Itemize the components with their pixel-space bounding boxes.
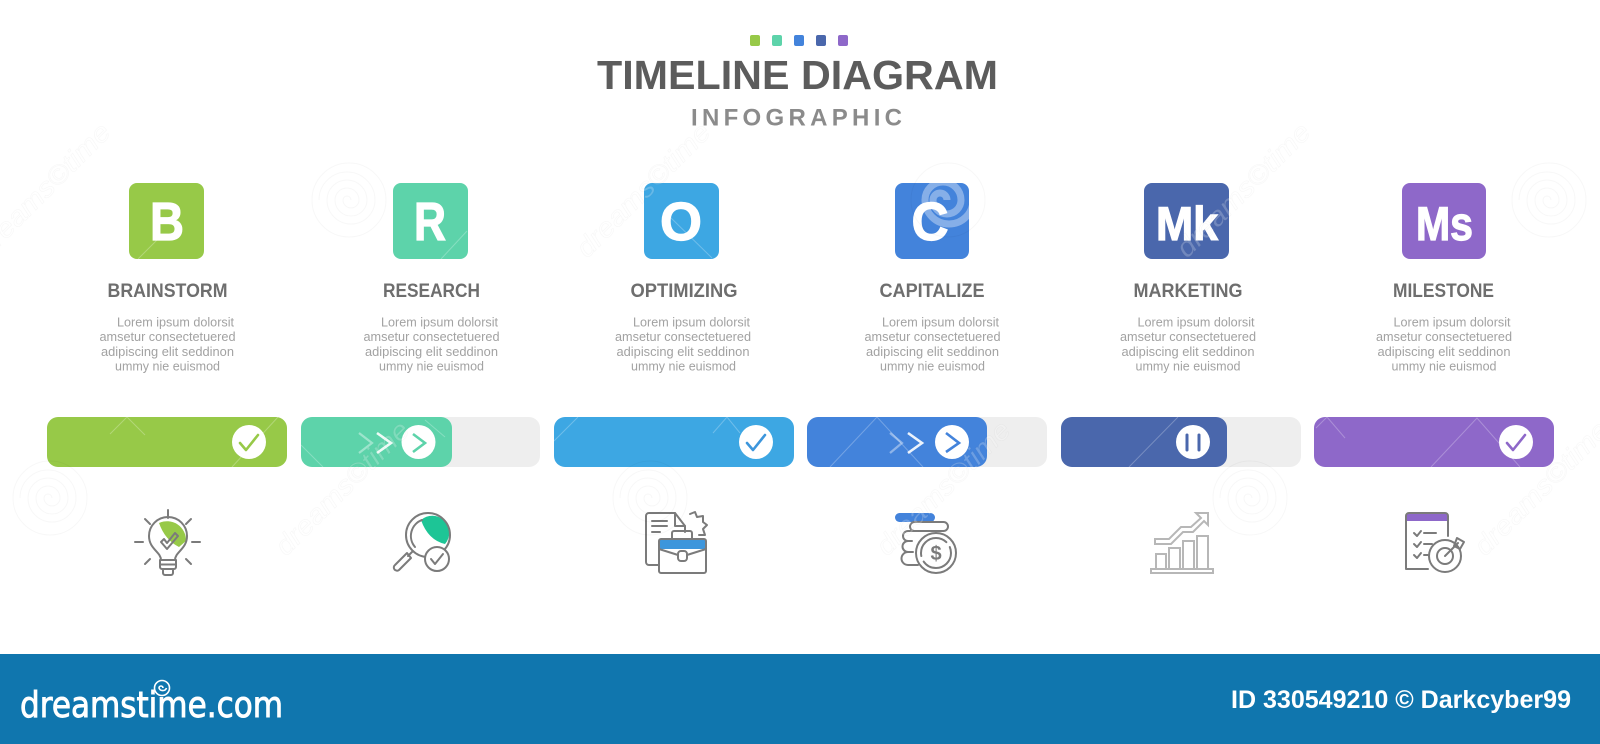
panel: brainstorm (100, 183, 236, 374)
description (100, 316, 236, 374)
heading: OPTIMIZING (630, 281, 738, 302)
progress bar: brainstorm complete (47, 417, 287, 467)
description: amsetur consectetuered (864, 330, 1001, 344)
description: adipiscing elit seddinon (1122, 345, 1255, 359)
icon: growth bar chart (1151, 513, 1213, 573)
progress bar: marketing paused (1061, 417, 1301, 467)
description: adipiscing elit seddinon (1378, 345, 1511, 359)
title: TIMELINE DIAGRAM (597, 52, 998, 98)
progress bar: research in progress (301, 417, 540, 467)
description: Lorem ipsum dolorsit (882, 316, 1000, 330)
heading: BRAINSTORM (108, 281, 228, 302)
letter tile R (393, 183, 468, 259)
footer banner (0, 654, 1600, 744)
letter tile R: R (414, 192, 446, 252)
description: adipiscing elit seddinon (616, 345, 750, 359)
description (615, 316, 751, 374)
description: Lorem ipsum dolorsit (1394, 316, 1511, 330)
description: amsetur consectetuered (1376, 330, 1512, 344)
description: ummy nie euismod (631, 360, 736, 374)
description: Lorem ipsum dolorsit (117, 316, 235, 330)
description (1376, 316, 1512, 374)
image id and credit: ID 330549210 © Darkcyber99 (1231, 686, 1571, 714)
description: ummy nie euismod (115, 360, 220, 374)
brand spiral (154, 680, 170, 696)
description: amsetur consectetuered (364, 330, 500, 344)
heading: CAPITALIZE (880, 281, 984, 302)
description: adipiscing elit seddinon (101, 345, 234, 359)
watermark overlay: dreams©time (269, 415, 415, 561)
panel: marketing (1120, 183, 1256, 374)
description: adipiscing elit seddinon (365, 345, 498, 359)
description: amsetur consectetuered (1120, 330, 1256, 344)
description (364, 316, 500, 374)
icon: magnifier with check (394, 513, 450, 571)
letter tile Ms (1402, 183, 1486, 259)
description: ummy nie euismod (880, 360, 985, 374)
watermark overlay (350, 183, 1229, 535)
decorative colour dots (750, 35, 848, 46)
watermark overlay: dreams©time (1170, 117, 1316, 263)
heading: RESEARCH (383, 281, 480, 302)
watermark overlay: dreams©time (1468, 415, 1600, 561)
description: ummy nie euismod (379, 360, 484, 374)
progress bar: capitalize in progress (807, 417, 1047, 467)
icon: coin stack with dollar (895, 513, 956, 573)
letter tile B: B (150, 192, 184, 252)
icon: light bulb with check (135, 510, 200, 575)
description (1120, 316, 1256, 374)
subtitle: INFOGRAPHIC (691, 104, 902, 132)
heading: MARKETING (1134, 281, 1242, 302)
icon: coin stack with dollar: $ (930, 543, 942, 565)
letter tile Ms: Ms (1416, 197, 1473, 250)
description: ummy nie euismod (1136, 360, 1241, 374)
letter tile O (644, 183, 719, 259)
description: Lorem ipsum dolorsit (633, 316, 751, 330)
panel: capitalize (864, 183, 1001, 374)
panel: optimizing (615, 183, 751, 374)
icon: checklist with target (1406, 513, 1464, 572)
description: Lorem ipsum dolorsit (381, 316, 499, 330)
description: Lorem ipsum dolorsit (1138, 316, 1255, 330)
letter tile C (895, 183, 969, 259)
description: adipiscing elit seddinon (866, 345, 999, 359)
letter tile Mk: Mk (1156, 197, 1219, 250)
icon: document, gear and briefcase (646, 512, 707, 573)
description: amsetur consectetuered (100, 330, 236, 344)
progress bar: optimizing complete (554, 417, 794, 467)
watermark overlay: dreams©time (870, 415, 1016, 561)
brand logo text: dreamstime.com (20, 685, 283, 726)
panel: research (364, 183, 500, 374)
panel: milestone (1376, 183, 1512, 374)
letter tile O: O (660, 192, 702, 252)
letter tile Mk (1144, 183, 1229, 259)
letter tile C: C (912, 192, 948, 252)
progress bar: milestone complete (1314, 417, 1554, 467)
letter tile B (129, 183, 204, 259)
description: ummy nie euismod (1392, 360, 1497, 374)
watermark overlay: dreams©time (570, 117, 716, 263)
description: amsetur consectetuered (615, 330, 751, 344)
description (864, 316, 1001, 374)
heading: MILESTONE (1393, 281, 1494, 302)
